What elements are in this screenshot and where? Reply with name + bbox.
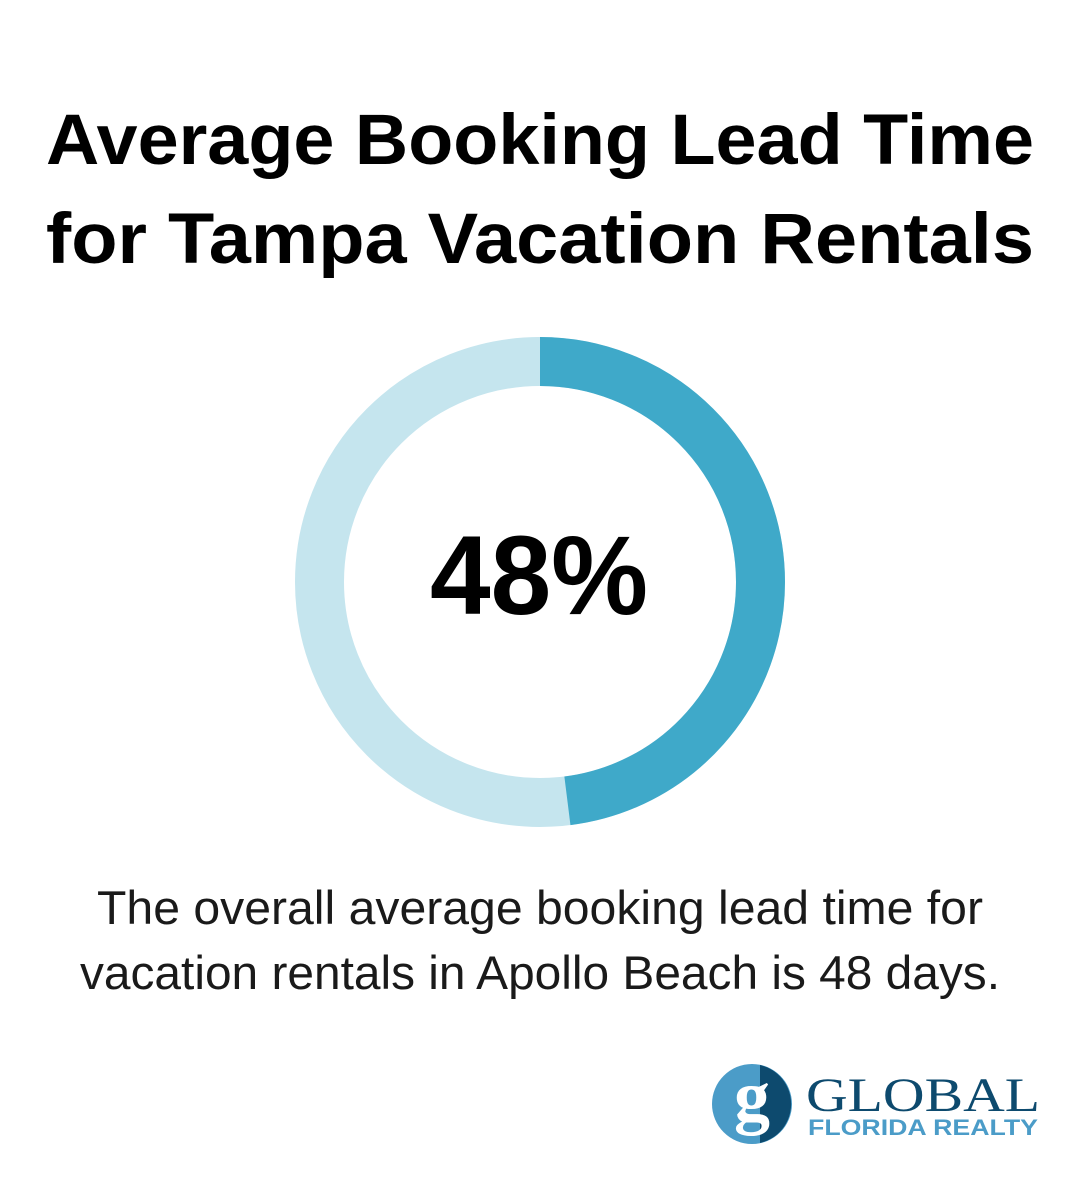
description text [80,881,1000,999]
description text: The overall average booking lead time for [97,881,983,934]
logo: Global Florida Realty: g [734,1056,770,1136]
percentage value: 48% [430,513,648,638]
title: for Tampa Vacation Rentals [46,200,1034,279]
description text: vacation rentals in Apollo Beach is 48 days. [80,946,1000,999]
logo: Global Florida Realty: FLORIDA REALTY [808,1115,1038,1140]
logo: Global Florida Realty [712,1056,1040,1144]
title: Average Booking Lead Time [46,101,1034,180]
donut chart [320,362,760,802]
logo: Global Florida Realty: GLOBAL [806,1069,1040,1122]
title [46,101,1034,279]
